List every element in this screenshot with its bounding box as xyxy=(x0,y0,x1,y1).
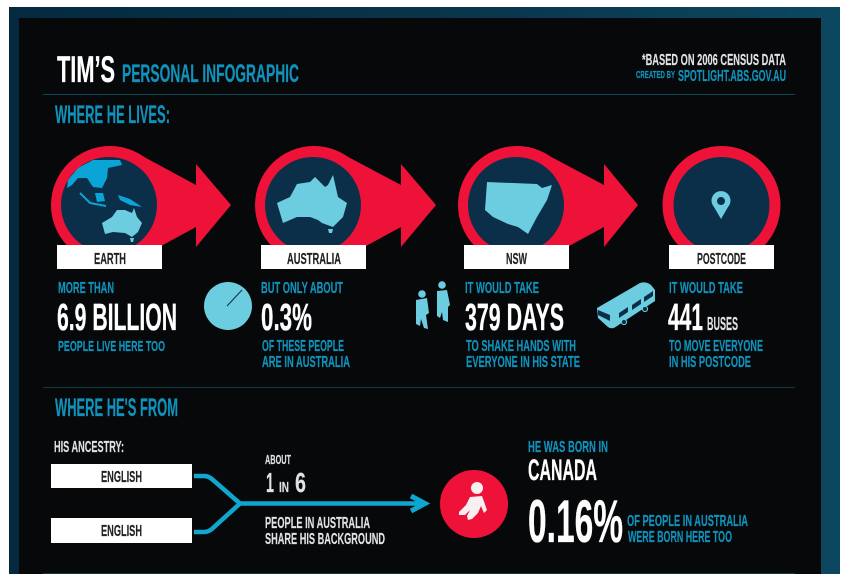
icon: map pin xyxy=(712,191,730,219)
label: earth: EARTH xyxy=(94,251,126,268)
stat: earth population: 6.9 BILLION xyxy=(57,297,177,339)
label: earth xyxy=(57,245,162,269)
stat: postcode buses xyxy=(668,280,763,371)
stat: born in canada: 0.16% xyxy=(528,488,623,555)
panel: postcode xyxy=(668,152,775,269)
icon: two people xyxy=(416,281,450,329)
ancestry box two xyxy=(51,518,192,543)
ancestry box two: ENGLISH xyxy=(101,523,142,540)
stat: postcode buses: IN HIS POSTCODE xyxy=(669,354,751,371)
icon: asia and australia map xyxy=(67,160,142,242)
stat: 1 in 6: IN xyxy=(279,479,289,496)
label: nsw xyxy=(464,245,569,269)
stat: earth population: MORE THAN xyxy=(58,280,114,297)
stat: australia share: BUT ONLY ABOUT xyxy=(261,280,343,297)
stat: born in canada: WERE BORN HERE TOO xyxy=(628,529,732,546)
icon: bus xyxy=(597,282,655,328)
stat: nsw handshakes: EVERYONE IN HIS STATE xyxy=(466,354,580,371)
stat: nsw handshakes: 379 DAYS xyxy=(465,297,564,339)
globe xyxy=(61,157,157,253)
stat: australia share: OF THESE PEOPLE xyxy=(262,338,344,355)
stat: 1 in 6: SHARE HIS BACKGROUND xyxy=(265,531,385,548)
icon: pie chart xyxy=(204,282,252,330)
stat: nsw handshakes: TO SHAKE HANDS WITH xyxy=(466,338,576,355)
stat: australia share: 0.3% xyxy=(261,297,312,339)
stat: 1 in 6: PEOPLE IN AUSTRALIA xyxy=(265,515,370,532)
stat: 1 in 6: 6 xyxy=(295,467,306,498)
census source note: CREATED BY xyxy=(636,70,675,81)
label: postcode: POSTCODE xyxy=(697,251,746,268)
label: nsw: NSW xyxy=(506,251,528,268)
title xyxy=(57,49,299,90)
stat: nsw handshakes: IT WOULD TAKE xyxy=(465,280,539,297)
stat: nsw handshakes xyxy=(465,280,580,371)
stat: postcode buses: TO MOVE EVERYONE xyxy=(669,338,763,355)
navy circle xyxy=(265,157,361,253)
arrow: merging ancestry lines xyxy=(194,476,425,532)
ancestry heading: HIS ANCESTRY: xyxy=(54,439,124,456)
stat: born in canada xyxy=(528,439,748,555)
stat: 1 in 6: ABOUT xyxy=(265,452,291,467)
ancestry box one: ENGLISH xyxy=(101,469,142,486)
panel: earth xyxy=(51,146,231,269)
title: PERSONAL INFOGRAPHIC xyxy=(122,60,299,88)
panel: nsw xyxy=(458,146,638,269)
stat: australia share xyxy=(261,280,350,371)
title: TIM’S xyxy=(57,49,115,90)
stat: australia share: ARE IN AUSTRALIA xyxy=(262,354,350,371)
stat: born in canada: HE WAS BORN IN xyxy=(528,439,608,456)
ancestry box one xyxy=(51,464,192,488)
heading: where he's from: WHERE HE'S FROM xyxy=(55,394,178,422)
red circle arrow xyxy=(255,146,436,264)
red circle arrow xyxy=(51,146,231,264)
red circle arrow xyxy=(458,146,638,264)
label: australia xyxy=(261,245,366,269)
navy circle xyxy=(468,157,564,253)
stat: postcode buses: 441 xyxy=(668,297,703,339)
census source note xyxy=(636,52,786,85)
stat: postcode buses: BUSES xyxy=(707,314,738,334)
icon: baby in red circle xyxy=(440,470,508,538)
heading: where he lives: WHERE HE LIVES: xyxy=(55,101,170,129)
icon: nsw map xyxy=(485,182,552,234)
stat: earth population xyxy=(57,280,177,355)
stat: born in canada: OF PEOPLE IN AUSTRALIA xyxy=(627,513,748,530)
stat: 1 in 6: 1 xyxy=(266,467,274,498)
panel: australia xyxy=(255,146,436,269)
stat: earth population: PEOPLE LIVE HERE TOO xyxy=(58,338,165,355)
label: australia: AUSTRALIA xyxy=(287,251,341,268)
red ring xyxy=(668,152,775,258)
stat: 1 in 6 xyxy=(265,452,385,548)
stat: born in canada: CANADA xyxy=(528,454,597,487)
icon: australia map xyxy=(277,175,347,233)
stat: postcode buses: IT WOULD TAKE xyxy=(669,280,743,297)
